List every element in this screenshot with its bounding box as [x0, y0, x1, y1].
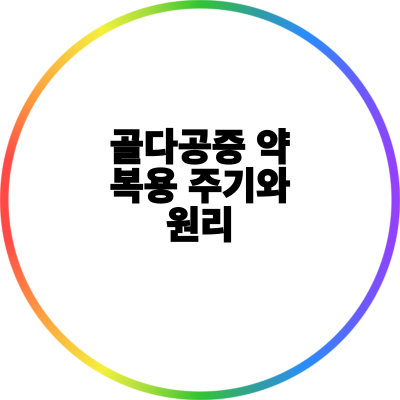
title: 원리	[166, 205, 234, 246]
title: 골다공증 약	[110, 127, 290, 168]
title	[110, 127, 290, 246]
title: 복용 주기와	[110, 166, 290, 207]
